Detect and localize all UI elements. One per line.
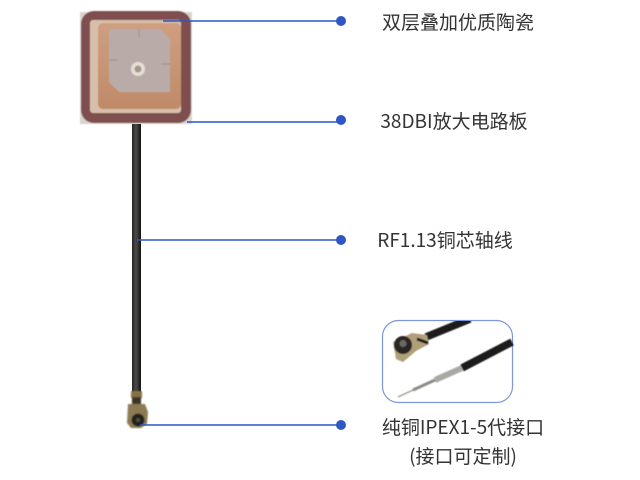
callout line: coaxial cable <box>137 235 346 245</box>
label: ceramic: 双层叠加优质陶瓷 <box>382 8 534 35</box>
label: connector: 纯铜IPEX1-5代接口 <box>382 413 544 440</box>
label: amplifier board: 38DBI放大电路板 <box>380 107 528 134</box>
callout line: amplifier board <box>187 115 346 125</box>
photo: stripped coaxial cable <box>398 342 512 397</box>
callout line: connector <box>140 420 346 430</box>
photo: upper cable and connector <box>393 319 470 362</box>
label: customizable: (接口可定制) <box>409 442 517 469</box>
callout line: ceramic <box>163 16 346 26</box>
icon: coaxial cable <box>132 124 141 392</box>
icon: ceramic patch antenna <box>80 11 192 124</box>
label: coaxial cable: RF1.13铜芯轴线 <box>377 226 513 253</box>
icon: IPEX connector <box>127 391 148 428</box>
panel: connector photo inset <box>382 319 512 402</box>
